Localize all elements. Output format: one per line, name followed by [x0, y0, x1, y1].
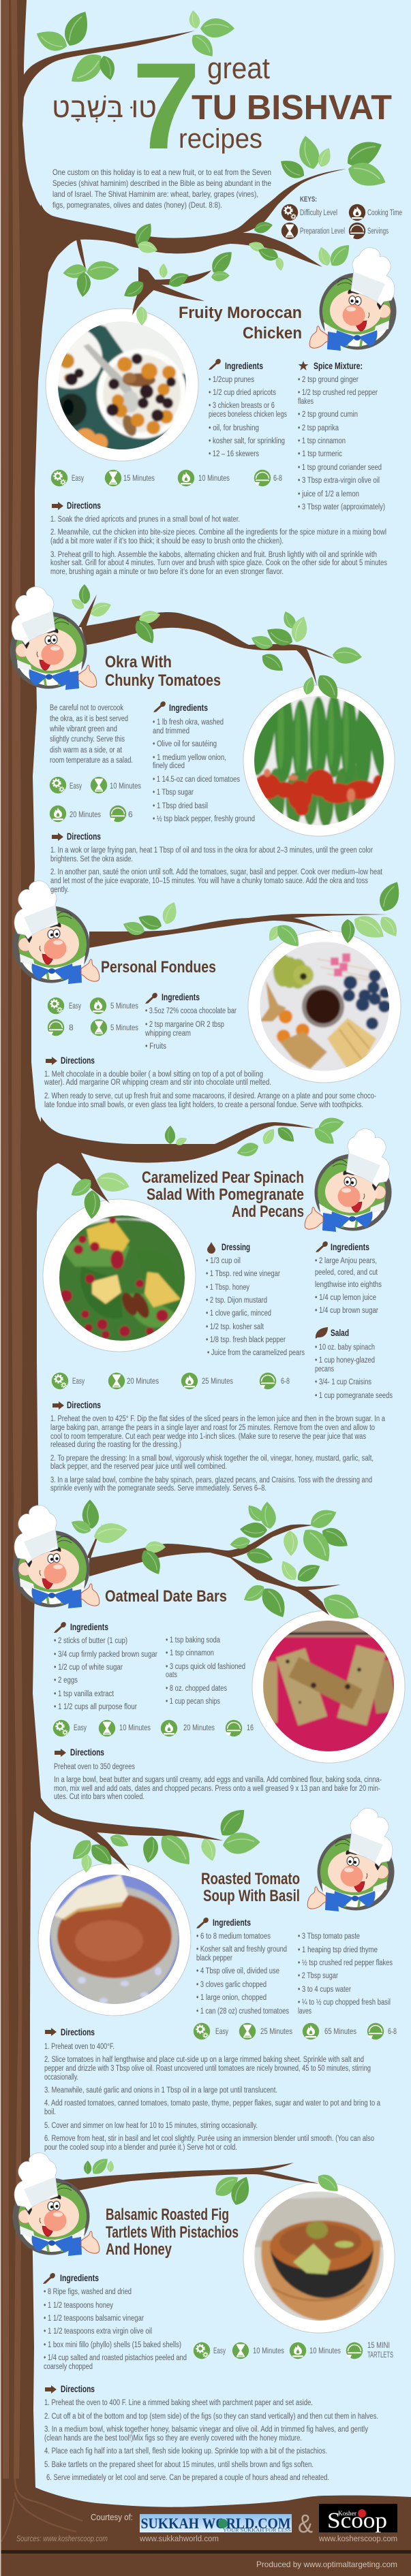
directions text	[54, 1763, 382, 1801]
ingredient list: • 1 14.5-oz can diced tomatoes	[153, 776, 240, 784]
stats row: 6-8	[273, 473, 282, 483]
recipe 1: fruity moroccan chicken	[50, 304, 387, 576]
photo: pear spinach salad	[43, 1199, 196, 1352]
ampersand: &	[298, 2510, 313, 2539]
directions text	[50, 1415, 385, 1493]
intro text	[52, 168, 271, 210]
directions text	[44, 2043, 380, 2152]
ingredient list: • 12 – 16 skewers	[209, 450, 259, 458]
directions text: brightens. Set the okra aside.	[50, 855, 133, 863]
stats block: 6	[128, 810, 133, 819]
icon: spoon	[196, 1916, 209, 1928]
ingredient list left: black pepper	[196, 1954, 232, 1962]
directions text: 1. Soak the dried apricots and prunes in a small bowl of hot water.	[50, 515, 240, 524]
ingredient list: • 1 Tbsp sugar	[153, 789, 194, 797]
url: sukkahworld: www.sukkahworld.com	[139, 2535, 219, 2543]
recipe title: And Honey	[106, 2240, 172, 2259]
ingredients heading: Ingredients	[60, 2272, 99, 2283]
stats row: 25 Minutes	[260, 2026, 292, 2036]
icon: star	[299, 361, 308, 370]
directions text: 1. Preheat oven to 400°F.	[44, 2043, 115, 2051]
ingredient list: • 1 lb fresh okra, washed	[153, 718, 224, 727]
spice list: • 3 Tbsp extra-virgin olive oil	[298, 477, 380, 485]
ingredient list	[153, 718, 255, 823]
directions heading: Directions	[67, 1399, 101, 1410]
ingredient list: • Fruits	[145, 1043, 166, 1051]
recipe 7: balsamic roasted fig tartlets	[43, 2206, 393, 2482]
directions text: sprinkle evenly with the pomegranate seeds. Serve immediately. Serves 6–8.	[50, 1484, 267, 1493]
ingredient list: • 1 1/2 teaspoons honey	[44, 2302, 113, 2310]
recipe title	[179, 304, 302, 343]
icon: spoon	[43, 2272, 56, 2284]
stats row: 15 MINI	[367, 2340, 390, 2350]
stats row: 10 Minutes	[309, 2346, 341, 2355]
icon: arrow	[46, 1057, 57, 1065]
directions text	[50, 846, 383, 894]
recipe title: Chicken	[243, 324, 302, 343]
chef mascot: soup	[307, 1809, 394, 1911]
recipe title: Balsamic Roasted Fig	[106, 2206, 229, 2224]
recipe 6: roasted tomato soup with basil	[44, 1870, 397, 2152]
stats row	[51, 470, 282, 486]
ingredient list: • 1 1/2 teaspoons balsamic vinegar	[44, 2315, 144, 2323]
ingredient list: • 3 chicken breasts or 6	[209, 402, 275, 410]
url: kosherscoop: www.kosherscoop.com	[318, 2535, 397, 2543]
ingredient list: pieces boneless chicken legs	[209, 411, 287, 419]
directions text: 5. Cover and simmer on low heat for 10 to 15 minutes, stirring occasionally.	[44, 2122, 258, 2130]
ingredient list: coarsely chopped	[44, 2363, 93, 2371]
directions text: released during the roasting for the dressing.)	[50, 1441, 181, 1449]
recipe title: Salad With Pomegranate	[147, 1186, 304, 1204]
spice list: • 1 tsp turmeric	[298, 450, 342, 458]
recipe title: Soup With Basil	[203, 1887, 300, 1905]
ingredient list right: • 1 tsp cinnamon	[166, 1649, 214, 1657]
directions text: Preheat oven to 350 degrees	[54, 1763, 135, 1771]
dressing list: • 1 Tbsp. honey	[206, 1284, 249, 1292]
ingredient list: • 2 tsp margarine OR 2 tbsp	[145, 1021, 224, 1029]
ingredient list left	[196, 1933, 289, 2016]
ingredient list left: • 1 large onion, chopped	[196, 1994, 267, 2002]
ingredient list: • 1 Tbsp dried basil	[153, 802, 208, 810]
numeral 7: 7	[132, 37, 200, 175]
keys legend: Preparation Level	[300, 227, 345, 236]
icon: arrow	[55, 1749, 66, 1757]
ingredient list right: • 2 Tbsp sugar	[298, 1972, 338, 1980]
intro text: land of Israel. The Shivat Haminim are: wheat, barley, grapes (vines),	[52, 189, 258, 199]
photo: okra	[243, 685, 395, 836]
photo: fondue	[248, 930, 401, 1083]
producer credit: Produced by www.optimaltargeting.com	[256, 2560, 397, 2569]
ingredient list: • 3.5oz 72% cocoa chocolate bar	[145, 1007, 237, 1015]
leaves	[33, 7, 405, 2208]
intro text: One custom on this holiday is to eat a new fruit, or to eat from the Seven	[52, 168, 271, 177]
ingredient list left: • 1 tsp vanilla extract	[54, 1690, 115, 1698]
intro paragraph: room temperature as a salad.	[50, 757, 133, 765]
spice list: • 1 tsp cinnamon	[298, 437, 346, 445]
directions text	[50, 515, 387, 576]
ingredient list left: • 6 to 8 medium tomatoes	[196, 1933, 271, 1941]
recipe title: Caramelized Pear Spinach	[142, 1168, 304, 1187]
ingredient list	[209, 376, 287, 458]
directions text: 6. Serve immediately or let cool and serve. Can be prepared a couple of hours ahead and reheated.	[46, 2474, 329, 2482]
word recipes: recipes	[179, 124, 262, 154]
ingredient list left: • 1/2 cup of white sugar	[54, 1664, 123, 1672]
spice list: • 1 tsp ground coriander seed	[298, 464, 382, 472]
ingredient list	[44, 2288, 187, 2371]
intro paragraph	[49, 704, 133, 765]
stats row: Easy	[74, 1723, 87, 1732]
ingredient list: • 2 large Anjou pears,	[315, 1257, 377, 1265]
stats row: 6-8	[281, 1376, 290, 1386]
ingredient list: peeled, cored, and cut	[315, 1269, 378, 1277]
ingredients heading: Ingredients	[213, 1917, 251, 1928]
directions heading: Directions	[61, 2026, 95, 2037]
logo: kosher scoop	[319, 2504, 397, 2533]
ingredient list right: • 1 cup pecan ships	[166, 1698, 220, 1706]
ingredient list: • 1/2cup prunes	[209, 376, 254, 384]
stats row: Easy	[72, 1376, 85, 1386]
directions text: black pepper, and the reserved pear juice until well combined.	[50, 1463, 227, 1471]
ingredient list right: • 8 oz. chopped dates	[166, 1685, 227, 1693]
spice list: • 2 tsp ground ginger	[298, 376, 359, 384]
dressing list: • 2 tsp. Dijon mustard	[206, 1297, 267, 1305]
ingredient list: • Olive oil for sautéing	[153, 740, 217, 748]
icon: spoon	[145, 991, 158, 1004]
spice list: • juice of 1/2 a lemon	[298, 490, 359, 498]
ingredient list: • 1/4 cup brown sugar	[315, 1307, 378, 1315]
recipe title: Chunky Tomatoes	[105, 671, 221, 690]
icon: arrow	[52, 833, 63, 841]
icon: arrow	[52, 1401, 64, 1410]
salad list: • 1 cup pomegranate seeds	[315, 1392, 393, 1400]
dressing list	[206, 1257, 305, 1357]
ingredient list	[315, 1257, 382, 1315]
directions text: occasionally.	[44, 2073, 78, 2082]
recipe 4: caramelized pear spinach salad	[50, 1168, 393, 1493]
stats block: 5 Minutes	[110, 1023, 138, 1032]
footer	[1, 2504, 411, 2569]
dressing list: • 1/3 cup oil	[206, 1257, 241, 1265]
recipe title: Roasted Tomato	[201, 1870, 300, 1888]
ingredient list: • 1/4 cup lemon juice	[315, 1294, 376, 1302]
logo: sukkah world: SUKKAH WORLD.COM	[140, 2515, 291, 2532]
stats block: 8	[69, 1023, 74, 1032]
dressing list: • 1 clove garlic, minced	[206, 1309, 271, 1318]
recipe title: And Pecans	[232, 1203, 304, 1221]
directions heading: Directions	[67, 831, 101, 842]
recipe title: Okra With	[105, 653, 172, 671]
courtesy label: Courtesy of:	[91, 2512, 133, 2522]
photo: moroccan chicken	[40, 308, 198, 462]
ingredient list left	[54, 1637, 157, 1711]
ingredients heading: Ingredients	[162, 991, 200, 1002]
spice list: • 3 Tbsp water (approximately)	[298, 503, 385, 511]
ingredient list left: • 2 eggs	[54, 1676, 78, 1685]
ingredient list left: • 4 Tbsp olive oil, divided use	[196, 1967, 279, 1975]
spice mixture heading: Spice Mixture:	[314, 360, 363, 371]
ingredient list: whipping cream	[144, 1030, 191, 1038]
ingredient list right	[166, 1636, 245, 1706]
salad list: • 3/4- 1 cup Craisins	[315, 1378, 371, 1386]
spice list: • 2 tsp paprika	[298, 424, 339, 432]
TU BISHVAT: TU BISHVAT	[192, 88, 392, 127]
directions text	[44, 2399, 378, 2482]
dressing list: • 1/8 tsp. fresh black pepper	[206, 1336, 286, 1344]
stats block: Easy	[69, 1001, 81, 1011]
intro paragraph: slightly crunchy. Serve this	[50, 735, 125, 744]
stats row: TARTLETS	[367, 2350, 393, 2359]
logo: kosher scoop: Kosher	[338, 2511, 357, 2517]
directions text: 1. Melt chocolate in a double boiler ( a bowl sitting on top of a pot of boiling	[44, 1070, 263, 1079]
ingredient list	[144, 1007, 237, 1051]
spice list: flakes	[298, 398, 314, 406]
recipe 2: okra with chunky tomatoes	[49, 653, 383, 894]
branches	[20, 31, 388, 2191]
directions heading: Directions	[67, 500, 101, 511]
stats block	[50, 777, 141, 822]
ingredient list: • kosher salt, for sprinkling	[209, 437, 285, 445]
ingredients heading: Ingredients	[70, 1621, 108, 1632]
recipe title: Oatmeal Date Bars	[105, 1587, 227, 1606]
stats block: 10 Minutes	[110, 781, 141, 791]
stats row	[53, 1720, 254, 1736]
directions text: boil.	[44, 2108, 56, 2116]
spice list: • 2 tsp ground cumin	[298, 411, 358, 419]
directions heading: Directions	[61, 1055, 95, 1066]
hebrew title: טוּ בִּשְׁבָט	[52, 92, 157, 123]
stats block: 5 Minutes	[110, 1001, 138, 1011]
ingredient list left: • 2 sticks of butter (1 cup)	[54, 1637, 127, 1645]
ingredient list: and trimmed	[153, 727, 189, 735]
ingredient list: • 1 box mini fillo (phyllo) shells (15 baked shells)	[44, 2341, 181, 2349]
stats row: 20 Minutes	[127, 1376, 159, 1386]
keys legend: Difficulty Level	[300, 209, 337, 217]
directions text: gently.	[50, 886, 69, 894]
recipe 5: oatmeal date bars	[53, 1587, 382, 1801]
recipe title	[201, 1870, 300, 1905]
chef mascot: okra	[10, 587, 97, 690]
icon: arrow	[45, 2028, 57, 2036]
ingredient list left: • 1 1/2 cups all purpose flour	[54, 1703, 137, 1711]
keys legend	[281, 195, 402, 239]
ingredient list right: • 3 cups quick old fashioned	[166, 1663, 245, 1671]
directions heading: Directions	[70, 1747, 104, 1758]
ingredient list right: • ¼ to ½ cup chopped fresh basil	[298, 1999, 391, 2007]
ingredient list: • oil, for brushing	[209, 424, 259, 432]
recipe title: Personal Fondues	[101, 958, 216, 976]
stats row: 25 Minutes	[202, 1376, 233, 1386]
chef mascot: oatmeal bars	[12, 1506, 100, 1608]
stats row	[52, 1373, 290, 1389]
ingredients heading: Ingredients	[331, 1241, 369, 1252]
directions text: 1. Preheat the oven to 400 F. Line a rimmed baking sheet with parchment paper and set aside.	[44, 2399, 313, 2407]
key icon: servings	[349, 223, 365, 239]
directions text	[44, 1070, 376, 1109]
dressing list: • Juice from the caramelized pears	[207, 1349, 305, 1357]
photo: fig tartlet	[243, 2182, 395, 2333]
ingredient list: • 1 medium yellow onion,	[153, 754, 226, 762]
icon: arrow	[52, 502, 63, 510]
intro paragraph: dish warm as a side, or at	[50, 746, 123, 754]
stats row: 10 Minutes	[253, 2346, 284, 2355]
chef mascot: fondues	[12, 881, 100, 984]
photo: tomato soup	[38, 1863, 191, 2016]
title	[52, 37, 392, 175]
spice list	[298, 376, 385, 511]
stats row: Easy	[213, 2346, 226, 2355]
ingredient list: finely diced	[153, 762, 185, 770]
recipe title	[105, 653, 221, 690]
intro paragraph: Be careful not to overcook	[50, 704, 123, 712]
recipe title: Fruity Moroccan	[179, 304, 302, 322]
spice list: • 1/2 tsp crushed red pepper	[298, 389, 378, 397]
ingredient list: • ½ tsp black pepper, freshly ground	[153, 815, 255, 823]
ingredients heading: Ingredients	[169, 702, 208, 713]
icon: spoon	[209, 357, 222, 370]
directions heading: Directions	[61, 2383, 95, 2394]
directions text: 5. Bake tartlets on the prepared sheet for about 15 minutes, until shells brown and figs soften.	[44, 2461, 314, 2469]
stats row: Easy	[72, 473, 84, 483]
directions text: (clean hands are the best tool!)Mix figs so they are evenly covered with the honey mixture.	[44, 2434, 302, 2443]
salad list: • 10 oz. baby spinach	[315, 1343, 375, 1352]
directions text: more, brushing again a minute or two before it’s done for an even stronger flavor.	[50, 568, 284, 576]
ingredient list right: laves	[298, 2007, 311, 2016]
ingredient list: • 1 1/2 teaspoons extra virgin olive oil	[44, 2327, 152, 2336]
ingredient list left: • 1 can (28 oz) crushed tomatoes	[196, 2007, 289, 2016]
ingredient list left: • 3/4 cup firmly packed brown sugar	[54, 1651, 157, 1659]
ingredient list left: • 3 cloves garlic chopped	[196, 1981, 267, 1989]
stats row: Easy	[215, 2026, 228, 2036]
directions text: 3. Meanwhile, sauté garlic and onions in 1 Tbsp oil in a large pot until translucent.	[44, 2086, 277, 2095]
salad list: • 1 cup honey-glazed	[315, 1356, 375, 1365]
recipe title: Tartlets With Pistachios	[106, 2223, 239, 2242]
keys legend: Servings	[367, 227, 389, 236]
ingredient list: • 1/4 cup salted and roasted pistachios peeled and	[44, 2354, 187, 2362]
key icon: preparation	[281, 223, 298, 239]
ingredient list right: • 1 heaping tsp dried thyme	[298, 1946, 378, 1954]
recipe title	[142, 1168, 304, 1221]
stats row: 15 Minutes	[123, 473, 155, 483]
dressing list: • 1 Tbsp. red wine vinegar	[206, 1270, 280, 1278]
directions text: water). Add margarine OR whipping cream and stir into chocolate until melted.	[44, 1079, 271, 1087]
dressing heading: Dressing	[222, 1241, 250, 1252]
chef mascot: fig tartlets	[12, 2153, 100, 2256]
logo: kosher scoop: Scoop	[327, 2509, 387, 2533]
ingredient list: • 8 Ripe figs, washed and dried	[44, 2288, 132, 2296]
directions text: pour the cooled soup into a blender and purée it.) Serve hot or cold.	[44, 2144, 237, 2152]
directions text: 4. Place each fig half into a tart shell, flesh side looking up. Sprinkle top with a bit of the pistachios.	[44, 2447, 327, 2455]
sources: Sources: www.kosherscoop.com	[16, 2535, 108, 2543]
icon: drop	[207, 1242, 215, 1254]
intro paragraph: while vibrant green and	[49, 725, 117, 733]
icon: arrow	[45, 2385, 57, 2394]
logo: sukkah world: YOUR SUKKAH FOR LESS	[223, 2527, 291, 2533]
intro text: figs, pomegranates, olives and dates (honey) (Deut. 8:8).	[52, 200, 222, 210]
icon: leaf	[316, 1327, 328, 1339]
ingredient list right: • 3 to 4 cups water	[298, 1986, 351, 1994]
directions text: (add a bit more water if it’s too thick; it should be easy to brush onto the chicken).	[50, 537, 284, 545]
recipe 3: personal fondues	[44, 958, 376, 1109]
stats row: 65 Minutes	[324, 2026, 356, 2036]
stats row	[194, 2023, 397, 2039]
icon: spoon	[54, 1621, 67, 1633]
photo: oatmeal date bars	[252, 1610, 405, 1763]
ingredient list left: • Kosher salt and freshly ground	[196, 1945, 287, 1954]
icon: spoon	[153, 700, 166, 712]
key icon: cooking time	[349, 204, 365, 221]
ingredient list right: • 1 tsp baking soda	[166, 1636, 220, 1644]
stats row	[194, 2340, 393, 2359]
keys legend: KEYS:	[300, 195, 317, 204]
ingredient list right: • 3 Tbsp tomato paste	[298, 1933, 360, 1941]
recipe title	[106, 2206, 239, 2259]
chef mascot: moroccan chicken	[309, 248, 397, 351]
intro paragraph: the okra, as it is best served	[50, 715, 128, 723]
ingredient list: • 1/2 cup dried apricots	[209, 389, 276, 397]
ingredient list: lengthwise into eighths	[315, 1281, 382, 1289]
stats block	[48, 998, 138, 1036]
stats row: 10 Minutes	[198, 473, 230, 483]
directions text: utes. Cut into bars when cooled.	[54, 1793, 144, 1801]
stats block: 20 Minutes	[70, 810, 101, 819]
stats row: 20 Minutes	[183, 1723, 215, 1732]
dressing list: • 1/2 tsp. kosher salt	[206, 1323, 264, 1331]
stats row: 6-8	[388, 2026, 397, 2036]
word great: great	[207, 52, 270, 85]
chef mascot: salad	[305, 1129, 391, 1232]
key icon: difficulty	[281, 204, 298, 221]
salad heading: Salad	[331, 1327, 349, 1338]
salad list	[315, 1343, 393, 1400]
icon: spoon	[316, 1240, 329, 1252]
stats row: 16	[247, 1723, 254, 1732]
ingredient list right	[298, 1933, 393, 2016]
ingredient list right: oats	[166, 1671, 177, 1679]
stats block: Easy	[70, 781, 82, 791]
ingredients heading: Ingredients	[225, 360, 263, 371]
salad list: pecans	[315, 1365, 334, 1373]
stats row: 10 Minutes	[119, 1723, 151, 1732]
intro text: Species (shivat haminim) described in the Bible as being abundant in the	[52, 178, 271, 188]
